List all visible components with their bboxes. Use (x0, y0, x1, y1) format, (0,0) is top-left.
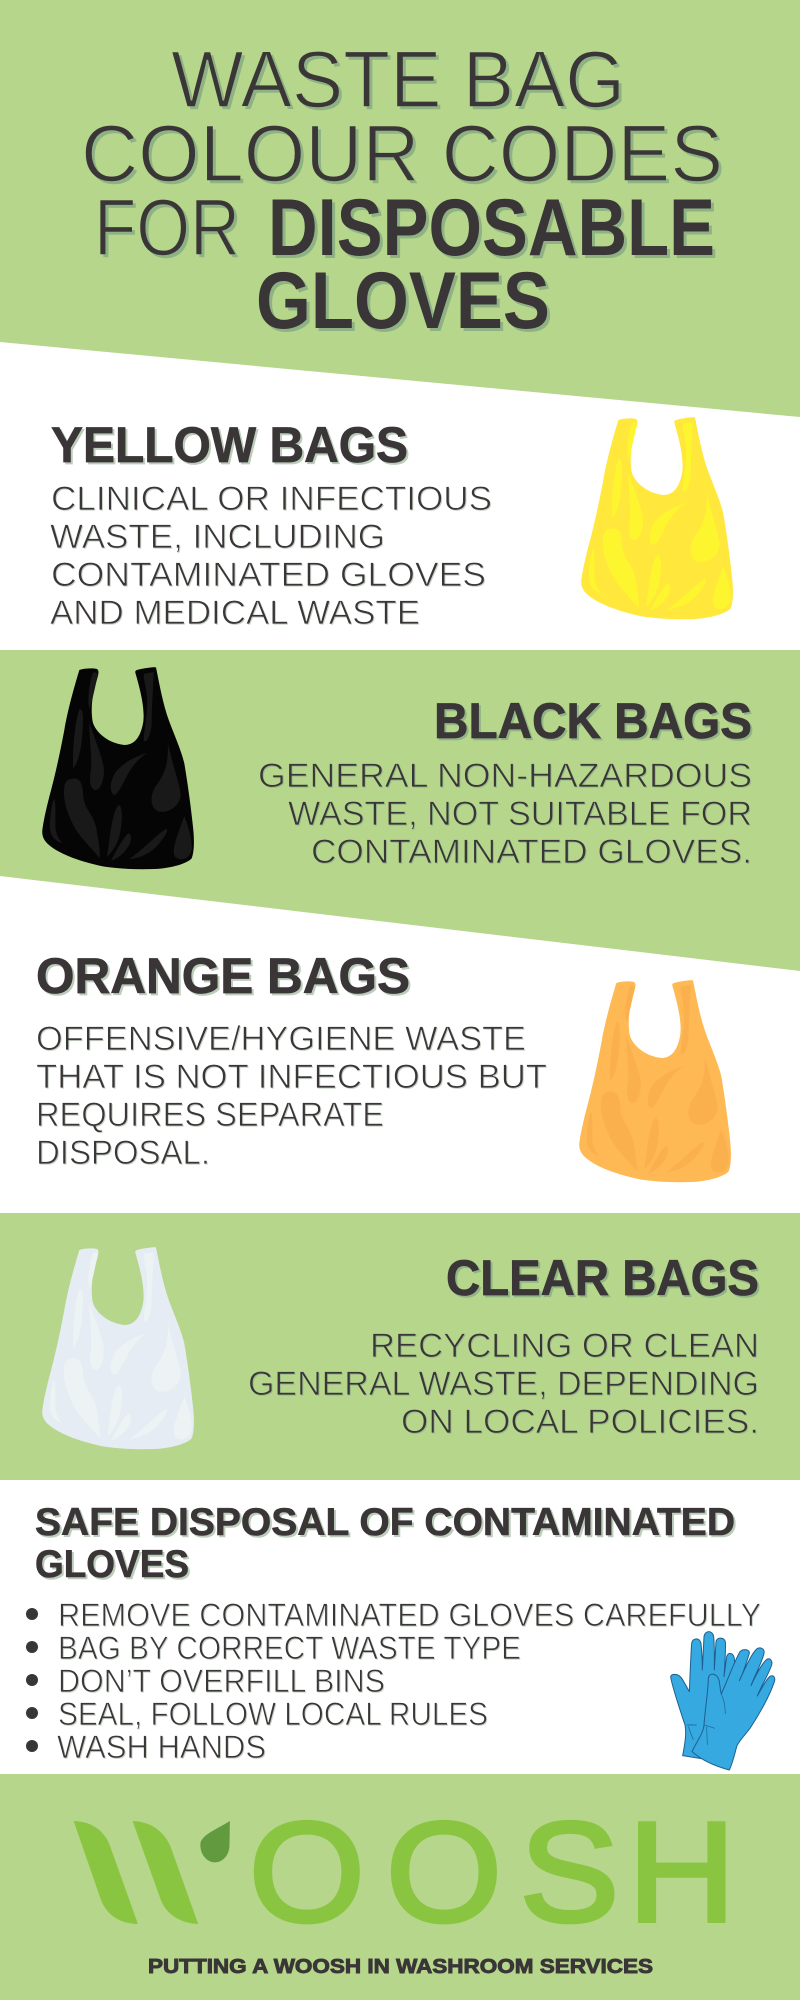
logo mark: W strokes and leaf (74, 1821, 230, 1924)
panel: clear bags (0, 1213, 800, 1480)
text: yellow bags description: CONTAMINATED GLOVES (51, 556, 486, 594)
title: DISPOSABLE (268, 183, 715, 273)
heading: safe disposal: SAFE DISPOSAL OF CONTAMINATED (35, 1501, 735, 1544)
icon: clear bag (42, 1247, 194, 1449)
text: clear bags description: GENERAL WASTE, DEPENDING (248, 1365, 759, 1403)
bullet list: DON’T OVERFILL BINS (58, 1663, 385, 1699)
title: WASTE BAG (171, 35, 625, 125)
icon: yellow bag (581, 417, 733, 619)
text: clear bags description: RECYCLING OR CLEAN (370, 1327, 759, 1365)
logo: Woosh (74, 1792, 736, 1951)
text: yellow bags description: AND MEDICAL WASTE (50, 594, 420, 632)
text: black bags description: GENERAL NON-HAZARDOUS (258, 757, 752, 795)
panel: black bags (0, 650, 800, 971)
tagline: PUTTING A WOOSH IN WASHROOM SERVICES (148, 1956, 653, 1978)
text: orange bags description: REQUIRES SEPARATE (36, 1096, 384, 1134)
heading: black bags: BLACK BAGS (434, 693, 752, 749)
title: FOR (94, 183, 240, 273)
title: GLOVES (256, 256, 550, 346)
text: clear bags description: ON LOCAL POLICIES. (401, 1403, 759, 1441)
text: black bags description (258, 757, 752, 871)
bullet list: SEAL, FOLLOW LOCAL RULES (58, 1696, 488, 1732)
heading: orange bags: ORANGE BAGS (36, 948, 410, 1004)
text: yellow bags description (50, 480, 492, 632)
text: yellow bags description: WASTE, INCLUDING (50, 518, 385, 556)
text: orange bags description (36, 1020, 547, 1172)
text: clear bags description (248, 1327, 759, 1441)
title (81, 35, 723, 346)
heading: safe disposal (35, 1501, 735, 1586)
text: black bags description: CONTAMINATED GLOVES. (311, 833, 752, 871)
panel: yellow bags (50, 417, 733, 632)
bullet list: REMOVE CONTAMINATED GLOVES CAREFULLY (58, 1597, 761, 1633)
panel: safe disposal (26, 1501, 775, 1770)
text: orange bags description: DISPOSAL. (36, 1134, 210, 1172)
logo wordmark: OOSH (249, 1792, 736, 1951)
text: orange bags description: OFFENSIVE/HYGIENE WASTE (36, 1020, 526, 1058)
title: COLOUR CODES (81, 109, 723, 199)
heading: yellow bags: YELLOW BAGS (51, 417, 408, 473)
heading: clear bags: CLEAR BAGS (446, 1250, 759, 1306)
icon: blue gloves (671, 1632, 775, 1770)
panel: orange bags (36, 948, 731, 1182)
text: yellow bags description: CLINICAL OR INFECTIOUS (51, 480, 492, 518)
bullet list: BAG BY CORRECT WASTE TYPE (58, 1630, 521, 1666)
bullet list (26, 1597, 761, 1765)
panel: title header (0, 0, 800, 417)
icon: orange bag (579, 980, 731, 1182)
heading: safe disposal: GLOVES (35, 1543, 189, 1586)
text: black bags description: WASTE, NOT SUITABLE FOR (288, 795, 752, 833)
bullet list: WASH HANDS (57, 1729, 266, 1765)
panel: footer (0, 1774, 800, 2000)
icon: black bag (42, 667, 194, 869)
text: orange bags description: THAT IS NOT INFECTIOUS BUT (36, 1058, 547, 1096)
